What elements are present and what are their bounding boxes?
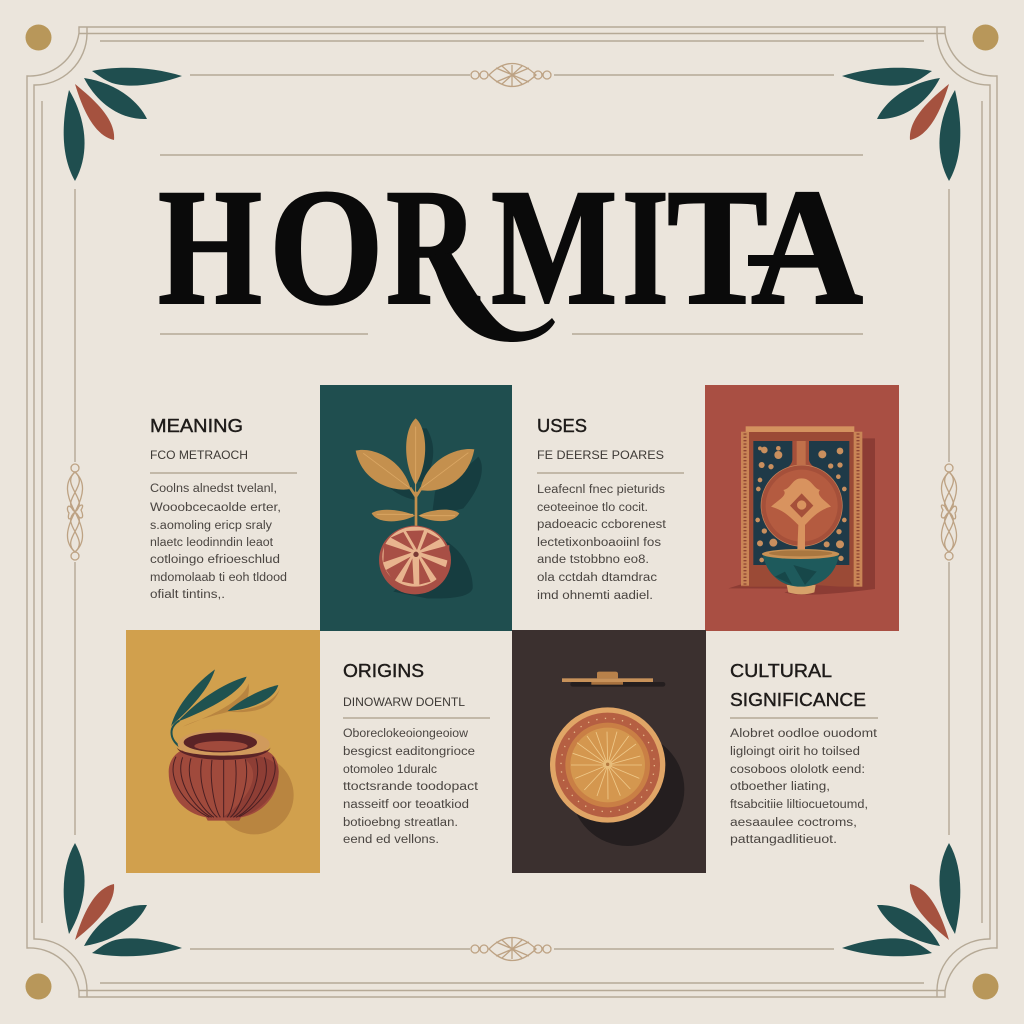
panel: cultural significance text: ftsabcitiie liltiocuetoumd,: [730, 799, 868, 811]
panel: cultural significance text: aesaaulee coctroms,: [730, 817, 857, 829]
ornament: left knot: [67, 464, 83, 560]
panel: meaning text: mdomolaab ti eoh tldood: [150, 572, 287, 584]
panel: meaning text: FCO METRAOCH: [150, 448, 248, 462]
decorative frame: top left corner with leaves: [26, 24, 512, 512]
panel: meaning text: [150, 416, 297, 601]
title: A: [751, 154, 863, 339]
title: R: [386, 155, 480, 340]
panel: cultural significance text: Alobret oodloe ouodomt: [730, 728, 878, 740]
decorative frame: top right corner with leaves: [512, 24, 998, 512]
panel: cultural significance text: otboether liating,: [730, 781, 830, 793]
panel: cultural significance text: CULTURAL: [730, 661, 832, 681]
panel: green plant and fruit illustration: [320, 385, 512, 631]
panel: origins text: eend ed vellons.: [343, 834, 439, 846]
title: [158, 154, 863, 342]
panel: origins text: besgicst eaditongrioce: [343, 746, 475, 758]
panel: origins text: DINOWARW DOENTL: [343, 695, 465, 709]
panel: uses text: Leafecnl fnec pieturids: [537, 484, 665, 496]
panel: red textile and bowl illustration: [705, 385, 899, 631]
panel: yellow clay pot illustration: [126, 630, 320, 873]
decorative frame: bottom right corner with leaves: [512, 512, 998, 1000]
panel: origins text: nasseitf oor teoatkiod: [343, 799, 469, 811]
panel: uses text: ceoteeinoe tlo cocit.: [537, 502, 648, 514]
panel: cultural significance text: ligloingt oirit ho toilsed: [730, 746, 860, 758]
panel: origins text: [343, 661, 490, 846]
panel: uses text: padoeacic ccborenest: [537, 519, 667, 531]
title: O: [269, 156, 384, 340]
panel: meaning text: cotloingo efrioeschlud: [150, 554, 280, 566]
panel: cultural significance text: [730, 661, 878, 846]
panel: origins text: botioebng streatlan.: [343, 817, 458, 829]
ornament: right knot: [941, 464, 957, 560]
panel: meaning text: s.aomoling ericp sraly: [150, 520, 272, 532]
panel: uses text: ande tstobbno eo8.: [537, 554, 649, 566]
title: H: [158, 154, 262, 339]
title: I: [622, 155, 669, 340]
panel: meaning text: Coolns alnedst tvelanl,: [150, 483, 277, 495]
panel: uses text: [537, 416, 684, 602]
ornament: top centre: [471, 64, 551, 86]
panel: cultural significance text: cosoboos ololotk eend:: [730, 764, 865, 776]
panel: origins text: Oboreclokeoiongeoiow: [343, 728, 469, 740]
decorative frame: bottom left corner with leaves: [26, 512, 512, 1000]
panel: dark disc illustration: [512, 630, 706, 873]
panel: uses text: ola cctdah dtamdrac: [537, 572, 657, 584]
panel: cultural significance text: SIGNIFICANCE: [730, 690, 866, 710]
panel: uses text: USES: [537, 416, 587, 436]
panel: uses text: imd ohnemti aadiel.: [537, 590, 653, 602]
panel: cultural significance text: pattangadlitieuot.: [730, 834, 837, 846]
panel: origins text: ORIGINS: [343, 661, 424, 681]
ornament: bottom centre: [471, 938, 551, 960]
panel: origins text: ttoctsrande toodopact: [343, 781, 479, 793]
title: T: [667, 155, 768, 340]
title: M: [491, 154, 617, 339]
panel: uses text: FE DEERSE POARES: [537, 448, 664, 462]
panel: uses text: lectetixonboaoiinl fos: [537, 537, 661, 549]
panel: meaning text: MEANING: [150, 416, 243, 436]
panel: meaning text: nlaetc leodinndin leaot: [150, 537, 274, 549]
panel: meaning text: Wooobcecaolde erter,: [150, 502, 281, 514]
panel: meaning text: ofialt tintins,.: [150, 589, 225, 601]
panel: origins text: otomoleo 1duralc: [343, 764, 437, 776]
